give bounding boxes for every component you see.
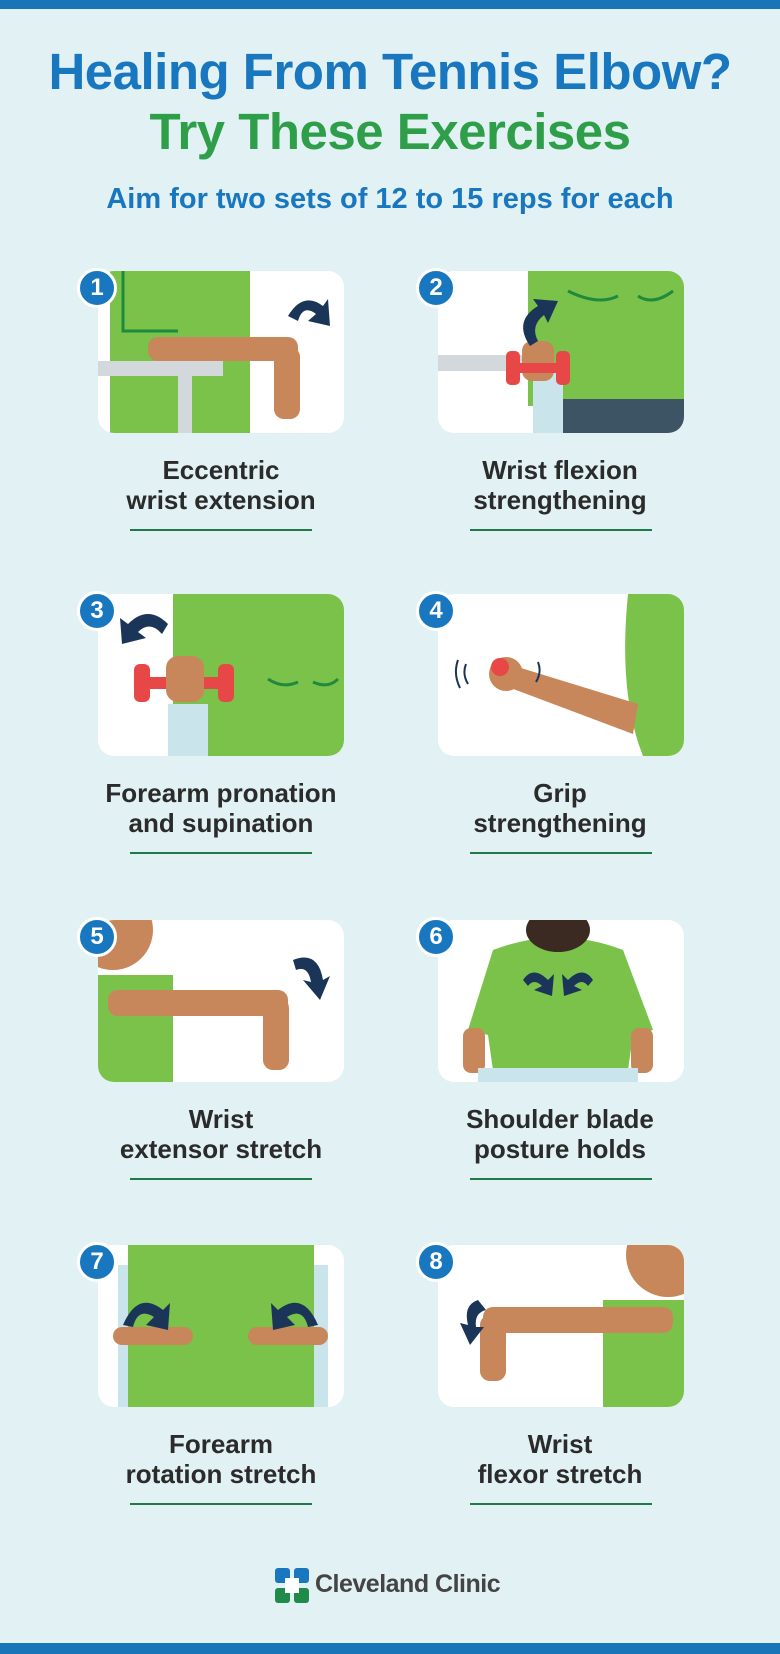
panel 3: [98, 594, 344, 756]
subtitle green: Try These Exercises: [149, 103, 630, 160]
number 4: [416, 591, 456, 631]
label 3: and supination: [129, 808, 313, 838]
label 5: Wrist: [189, 1104, 253, 1134]
label 8: flexor stretch: [478, 1459, 642, 1489]
panel 1: [98, 271, 344, 433]
panel 5: [98, 920, 344, 1082]
label 2: Wrist flexion: [482, 455, 638, 485]
label 5: extensor stretch: [120, 1134, 322, 1164]
number 8: [416, 1242, 456, 1282]
label 8: [478, 1429, 642, 1489]
number 8: 8: [429, 1248, 443, 1275]
label 4: [473, 778, 647, 838]
number 7: 7: [90, 1248, 104, 1275]
number 1: [77, 268, 117, 308]
label 6: Shoulder blade: [466, 1104, 654, 1134]
number 5: [77, 917, 117, 957]
panel 4: [438, 594, 684, 756]
label 8: Wrist: [528, 1429, 592, 1459]
label 6: posture holds: [474, 1134, 646, 1164]
logo: [275, 1568, 500, 1603]
label 7: [126, 1429, 316, 1489]
panel 2: [438, 271, 684, 433]
instruction: Aim for two sets of 12 to 15 reps for each: [106, 183, 674, 215]
panel 8: [438, 1245, 684, 1407]
number 3: [77, 591, 117, 631]
panel 7: [98, 1245, 344, 1407]
number 7: [77, 1242, 117, 1282]
logo: Cleveland Clinic: [315, 1570, 500, 1598]
icon: cleveland clinic cross: [275, 1568, 309, 1603]
number 5: 5: [90, 923, 104, 950]
label 1: Eccentric: [162, 455, 280, 485]
number 6: [416, 917, 456, 957]
label 7: Forearm: [169, 1429, 273, 1459]
label 3: [105, 778, 337, 838]
label 3: Forearm pronation: [105, 778, 337, 808]
label 7: rotation stretch: [126, 1459, 316, 1489]
label 1: wrist extension: [126, 485, 316, 515]
label 2: [473, 455, 647, 515]
label 5: [120, 1104, 322, 1164]
title: Healing From Tennis Elbow?: [48, 43, 732, 100]
number 6: 6: [429, 923, 443, 950]
panel 6: [438, 920, 684, 1082]
label 4: Grip: [533, 778, 587, 808]
label 1: [126, 455, 316, 515]
number 2: 2: [429, 274, 443, 301]
number 1: 1: [90, 274, 104, 301]
label 2: strengthening: [473, 485, 647, 515]
label 4: strengthening: [473, 808, 647, 838]
number 3: 3: [90, 597, 104, 624]
number 2: [416, 268, 456, 308]
label 6: [466, 1104, 654, 1164]
number 4: 4: [429, 597, 443, 624]
